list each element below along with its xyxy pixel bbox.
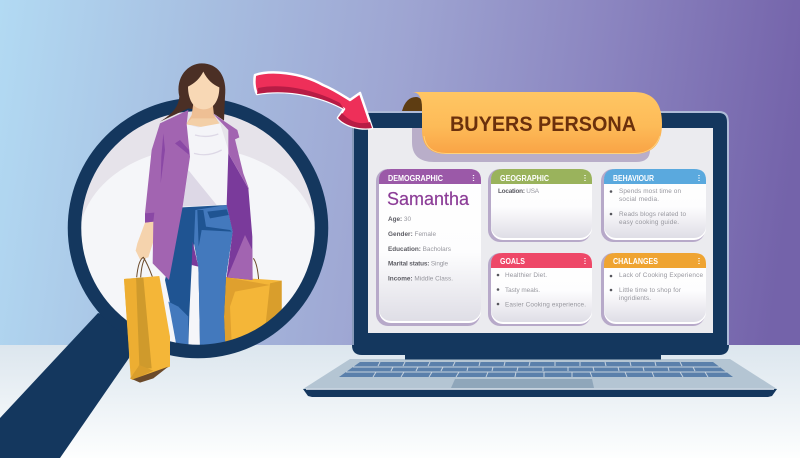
goals list — [497, 272, 586, 308]
demographic details: Gender: Female — [388, 231, 436, 238]
chalanges header — [604, 253, 706, 268]
demographic details: Income: Middle Class. — [388, 276, 453, 282]
jeans — [165, 205, 233, 347]
persona name: Samantha — [387, 189, 470, 209]
magnifier ring — [74, 104, 322, 352]
shirt — [183, 123, 228, 207]
goals list: Healthier Diet. — [505, 272, 547, 279]
goals heading: GOALS — [500, 256, 525, 266]
chalanges list — [610, 272, 703, 302]
panel: chalanges — [601, 253, 706, 326]
behaviour list: Reads blogs related to — [619, 211, 686, 218]
screen frame — [352, 112, 729, 355]
demographic details: Age: 30 — [388, 216, 411, 223]
magnifier lens — [81, 111, 315, 345]
behaviour list: Spends most time on — [619, 188, 681, 195]
behaviour heading: BEHAVIOUR — [613, 173, 655, 183]
behaviour list — [610, 188, 686, 226]
laptop front edge — [303, 389, 777, 397]
coat inner right — [227, 153, 252, 280]
banner curl — [402, 97, 423, 111]
left shopping bag — [124, 276, 170, 380]
chalanges heading: CHALANGES — [613, 256, 658, 266]
menu dots — [698, 175, 700, 181]
chalanges list: ingridients. — [619, 295, 651, 302]
demographic header — [379, 169, 481, 184]
laptop base — [303, 359, 777, 389]
behaviour header — [604, 169, 706, 184]
floor — [0, 345, 800, 458]
chalanges list: Lack of Cooking Experience — [619, 272, 703, 279]
trackpad — [451, 379, 594, 388]
panel: behaviour — [601, 169, 706, 242]
demographic details — [388, 216, 453, 282]
title banner — [402, 92, 662, 162]
hair back — [160, 63, 225, 122]
demographic details: Marital status: Single — [388, 260, 448, 268]
hinge — [405, 354, 661, 360]
banner shadow — [412, 128, 650, 162]
demographic heading: DEMOGRAPHIC — [388, 173, 443, 183]
hand — [136, 221, 154, 259]
panel: geographic — [488, 169, 592, 242]
face — [188, 72, 219, 109]
menu dots — [472, 175, 474, 181]
goals list: Tasty meals. — [505, 287, 540, 294]
coat left — [145, 110, 190, 280]
coat right lapel — [213, 113, 249, 190]
goals list: Easier Cooking experience. — [505, 302, 586, 308]
back shopping bag — [223, 258, 282, 347]
magnifying glass — [0, 104, 336, 458]
goals header — [491, 253, 592, 268]
screen display — [368, 128, 713, 333]
left bag handles — [137, 257, 152, 277]
behaviour list: social media. — [619, 196, 659, 203]
background wall — [0, 0, 800, 346]
banner body — [412, 92, 662, 154]
banner title text: BUYERS PERSONA — [450, 113, 636, 136]
laptop — [303, 112, 777, 397]
menu dots — [584, 175, 586, 181]
demographic details: Education: Bacholars — [388, 246, 451, 253]
geographic header — [491, 169, 592, 184]
panel: demographic — [376, 169, 481, 326]
chalanges list: Little time to shop for — [619, 287, 682, 294]
geographic heading: GEOGRAPHIC — [500, 173, 549, 183]
neck — [186, 103, 220, 125]
magnifier handle — [0, 313, 132, 458]
behaviour list: easy cooking guide. — [619, 219, 679, 226]
menu dots — [698, 258, 700, 264]
woman figure — [124, 63, 253, 383]
keyboard — [339, 362, 733, 377]
menu dots — [584, 258, 586, 264]
curved red arrow — [254, 72, 372, 129]
panel: goals — [488, 253, 592, 326]
geographic details: Location: USA — [498, 188, 540, 195]
